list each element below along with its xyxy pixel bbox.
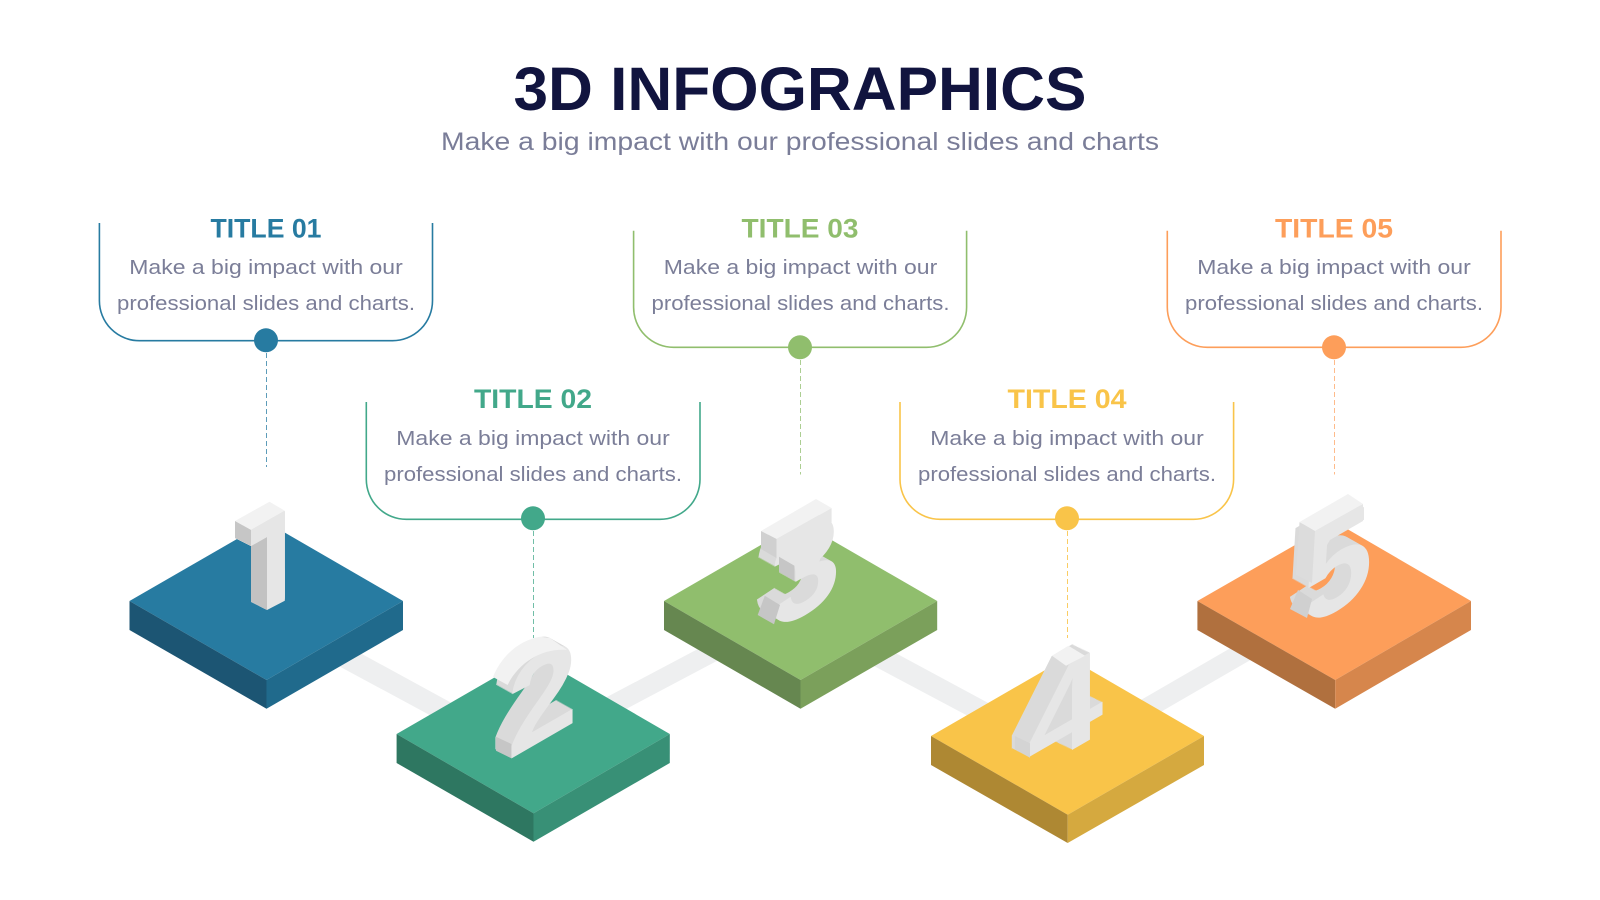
card 3 dashed leader (800, 360, 802, 474)
platform 3 (664, 522, 937, 709)
card 4 heading: TITLE 04 (1008, 384, 1126, 414)
3D numeral 5: 5 (1302, 474, 1373, 657)
3D numeral 2: 2 (507, 605, 578, 788)
shading on numeral 1 (235, 502, 285, 610)
card 4 dot (1055, 506, 1079, 530)
shading on numeral 2 (493, 637, 567, 758)
3D numeral 3: 3 (770, 478, 841, 661)
card 3 heading: TITLE 03 (742, 214, 858, 244)
card 2 body: professional slides and charts. (384, 463, 682, 486)
card 5 dot (1322, 335, 1346, 359)
card 4 dashed leader (1066, 531, 1068, 638)
card 1 body: Make a big impact with our (129, 256, 403, 279)
card 5 (1167, 214, 1501, 474)
card 1 body: professional slides and charts. (117, 292, 415, 315)
card 1 dashed leader (266, 353, 268, 467)
subtitle: Make a big impact with our professional slides and charts (441, 128, 1159, 156)
shading on numeral 5 (1290, 494, 1363, 618)
card 1 outline (99, 223, 433, 341)
3D numeral 4: 4 (1027, 617, 1103, 803)
card 5 body: professional slides and charts. (1185, 292, 1483, 315)
shading on numeral 4 (1015, 646, 1085, 758)
card 1 heading: TITLE 01 (210, 214, 322, 244)
card 5 body: Make a big impact with our (1197, 256, 1471, 279)
card 1 (99, 214, 433, 467)
card 4 body: Make a big impact with our (930, 427, 1204, 450)
platform 1 (130, 522, 403, 709)
card 2 outline (366, 402, 700, 519)
card 5 dashed leader (1334, 360, 1336, 474)
title: 3D INFOGRAPHICS (514, 55, 1086, 123)
card 1 dot (254, 328, 278, 352)
card 2 dashed leader (532, 531, 534, 638)
card 3 body: professional slides and charts. (652, 292, 950, 315)
card 3 body: Make a big impact with our (664, 256, 937, 279)
card 5 outline (1167, 231, 1501, 347)
platform 5 (1197, 522, 1471, 709)
card 2 dot (521, 506, 545, 530)
3D numeral 1: 1 (239, 470, 310, 653)
card 3 outline (634, 231, 967, 347)
card 2 (366, 384, 700, 638)
card 4 body: professional slides and charts. (918, 463, 1216, 486)
platform 4 (931, 657, 1204, 843)
card 2 body: Make a big impact with our (396, 427, 670, 450)
card 3 dot (788, 335, 812, 359)
card 2 heading: TITLE 02 (474, 384, 592, 414)
card 4 outline (900, 402, 1234, 519)
card 5 heading: TITLE 05 (1275, 214, 1393, 244)
card 4 (900, 384, 1234, 638)
card 3 (634, 214, 967, 474)
shading on numeral 3 (758, 499, 832, 624)
connector bands between platforms (322, 631, 1285, 726)
platform 2 (397, 655, 670, 842)
